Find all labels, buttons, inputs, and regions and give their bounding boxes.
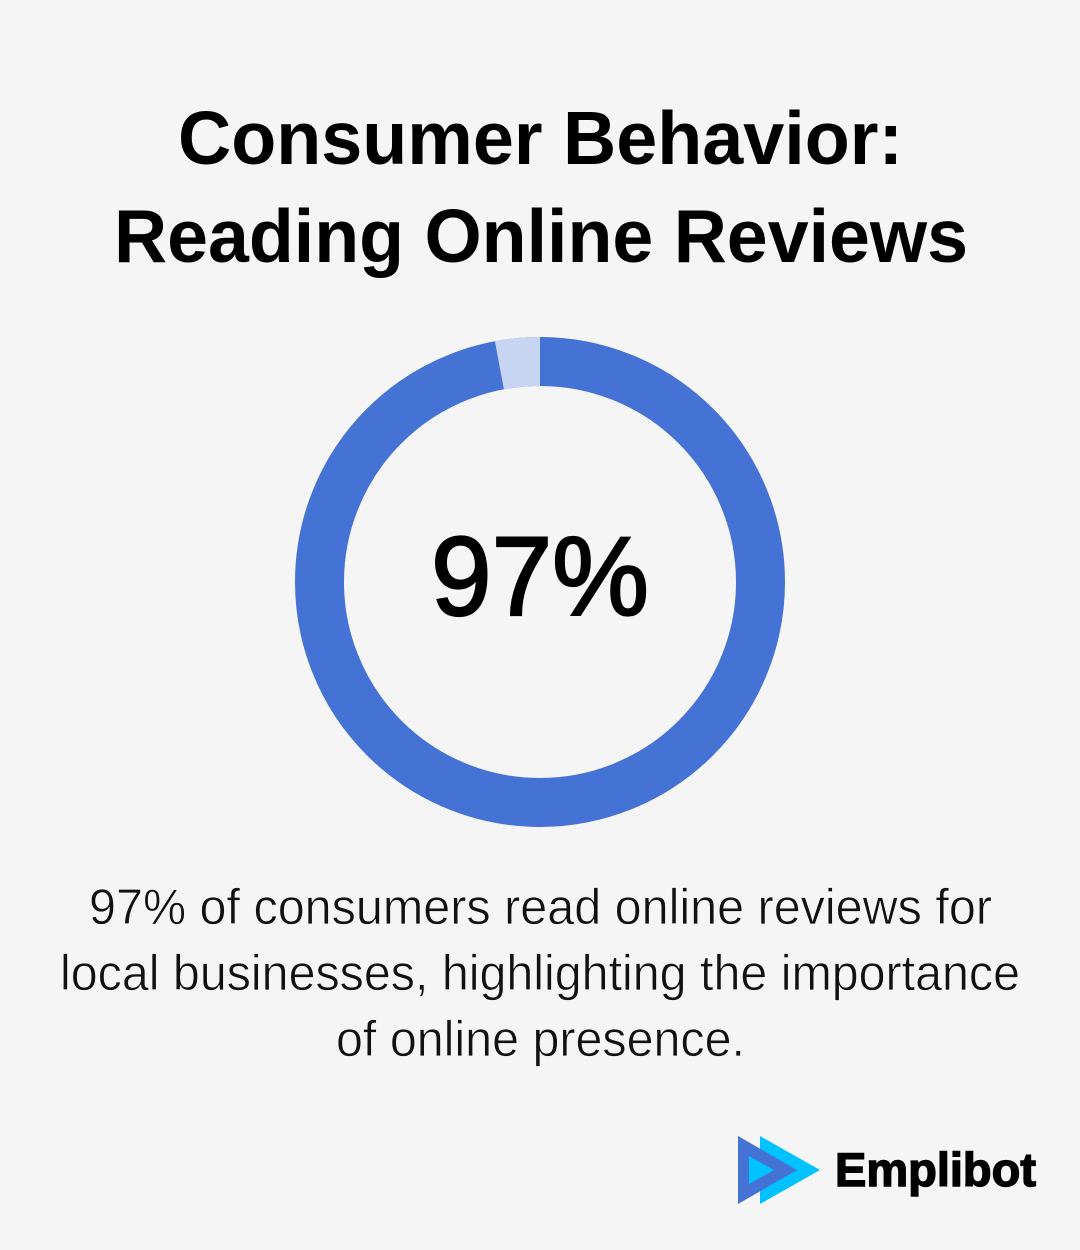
- icon: double play triangles: [738, 1136, 820, 1204]
- description text: local businesses, highlighting the importance: [60, 945, 1020, 1001]
- description text: [60, 879, 1020, 1067]
- logo wordmark: Emplibot: [835, 1143, 1036, 1196]
- description text: 97% of consumers read online reviews for: [89, 879, 992, 935]
- title: Consumer Behavior:: [178, 96, 903, 180]
- description text: of online presence.: [336, 1011, 745, 1067]
- donut chart: 97%: [320, 337, 760, 802]
- logo: Emplibot: [738, 1136, 1036, 1204]
- title: Reading Online Reviews: [114, 194, 968, 278]
- title: [114, 96, 968, 278]
- donut value: 97%: [431, 514, 649, 639]
